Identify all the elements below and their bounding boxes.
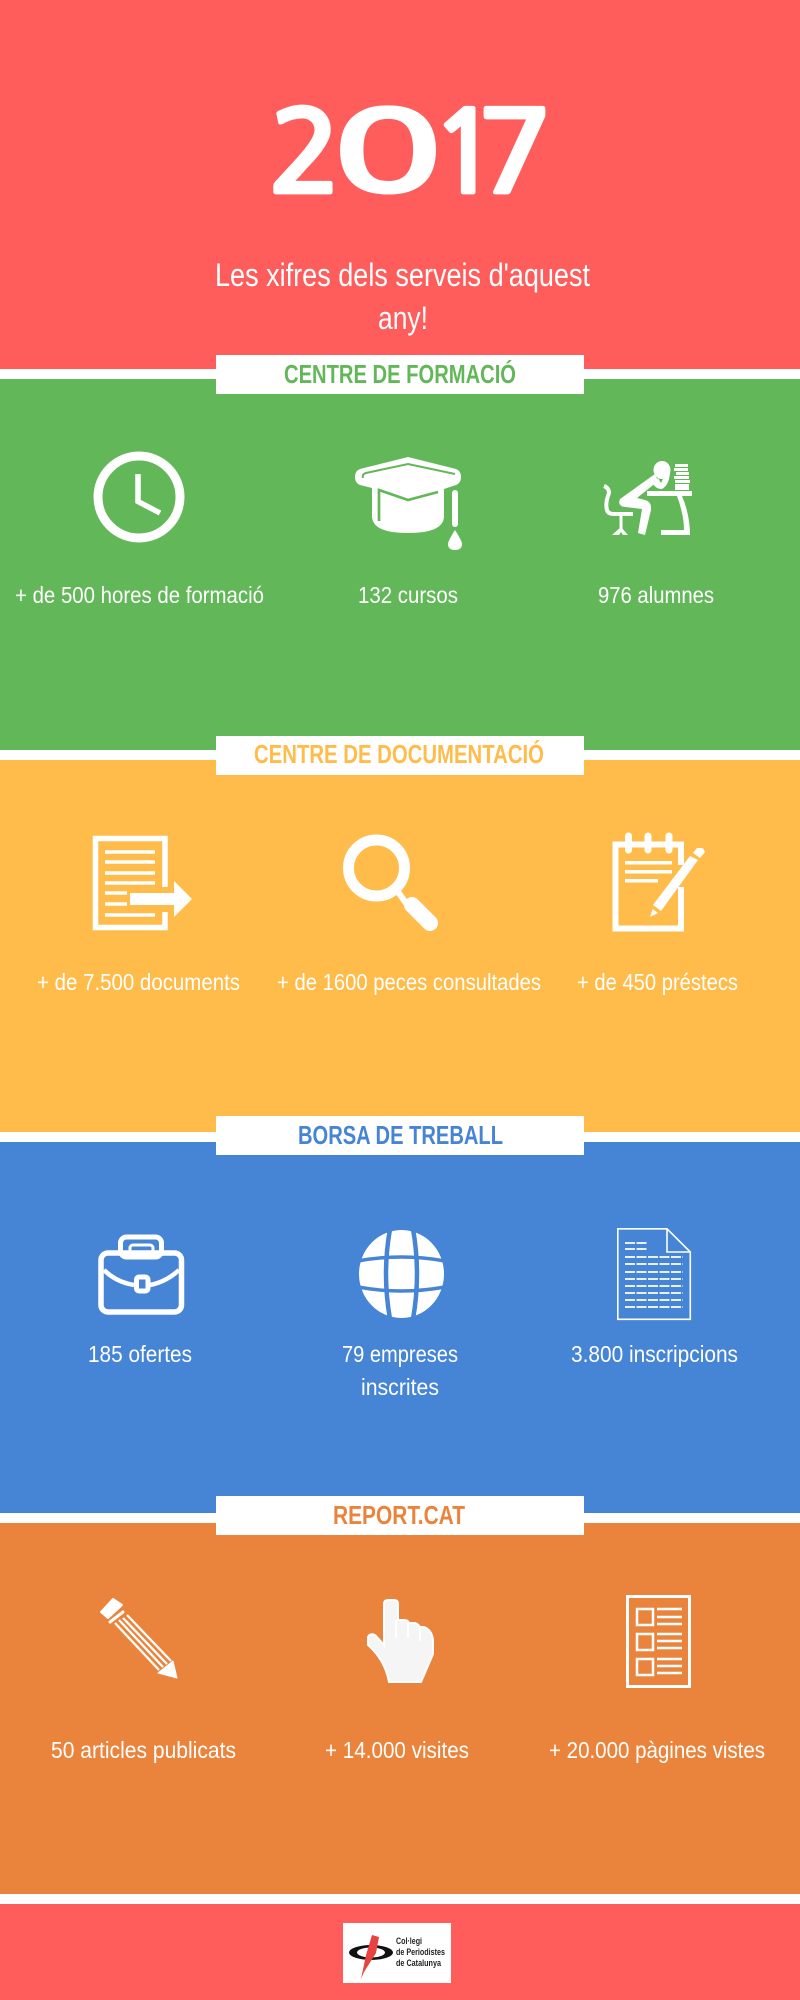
text: cursos: 132 cursos xyxy=(358,582,458,608)
panel: borsa de treball xyxy=(0,1116,800,1513)
panel: centre de formacio xyxy=(0,355,800,750)
heading: centre de formacio: CENTRE DE FORMACIÓ xyxy=(284,359,516,389)
text: empreses inscrites xyxy=(342,1341,458,1400)
icon: pointing hand xyxy=(368,1600,433,1682)
title: 2017: 0 xyxy=(331,98,444,211)
panel: footer xyxy=(0,1904,800,2000)
text: ofertes: 185 ofertes xyxy=(88,1341,192,1367)
logo: col·legi de periodistes: de Catalunya xyxy=(396,1958,442,1969)
heading: report.cat: REPORT.CAT xyxy=(333,1502,465,1530)
text: hores: + de 500 hores de formació xyxy=(15,582,264,608)
icon: student at desk xyxy=(604,461,692,535)
title: 2017 xyxy=(267,97,554,211)
icon: briefcase xyxy=(101,1237,182,1312)
icon: pencil xyxy=(101,1599,177,1678)
panel: header xyxy=(0,0,800,369)
text: visites: + 14.000 visites xyxy=(325,1737,469,1763)
title: 2017: 7 xyxy=(476,98,554,211)
logo: col·legi de periodistes: Col·legi xyxy=(396,1936,422,1947)
heading: borsa de treball: BORSA DE TREBALL xyxy=(298,1122,503,1150)
heading: report.cat xyxy=(216,1496,584,1535)
heading: centre de formacio xyxy=(216,355,584,394)
subtitle: any! xyxy=(378,300,428,336)
icon: clock xyxy=(98,456,180,538)
panel: report.cat xyxy=(0,1496,800,1894)
icon: graduation cap xyxy=(355,457,462,550)
text: inscripcions: 3.800 inscripcions xyxy=(571,1341,738,1367)
text: peces consultades: + de 1600 peces consultades xyxy=(277,969,541,995)
icon: notepad and pencil xyxy=(616,836,705,928)
title: 2017: 1 xyxy=(429,99,502,211)
subtitle xyxy=(215,257,590,336)
title: 2017: 2 xyxy=(267,97,343,210)
icon: form xyxy=(628,1596,690,1686)
icon: document with arrow xyxy=(96,838,192,928)
icon: magnifier xyxy=(348,840,430,923)
text: alumnes: 976 alumnes xyxy=(598,582,714,608)
logo: col·legi de periodistes: de Periodistes xyxy=(396,1947,445,1958)
text: prestecs: + de 450 préstecs xyxy=(577,969,738,995)
text: empreses inscrites: inscrites xyxy=(361,1374,439,1400)
text: empreses inscrites: 79 empreses xyxy=(342,1341,458,1367)
heading: borsa de treball xyxy=(216,1116,584,1155)
text: articles: 50 articles publicats xyxy=(51,1737,236,1763)
icon: thin document xyxy=(618,1229,690,1319)
heading: centre de documentacio xyxy=(216,736,584,775)
subtitle: Les xifres dels serveis d'aquest xyxy=(215,257,590,293)
logo: col·legi de periodistes xyxy=(343,1923,451,1983)
panel: centre de documentacio xyxy=(0,736,800,1132)
text: pagines vistes: + 20.000 pàgines vistes xyxy=(549,1737,765,1763)
icon: globe xyxy=(358,1229,445,1319)
text: documents: + de 7.500 documents xyxy=(37,969,240,995)
heading: centre de documentacio: CENTRE DE DOCUMENTACIÓ xyxy=(254,739,544,769)
